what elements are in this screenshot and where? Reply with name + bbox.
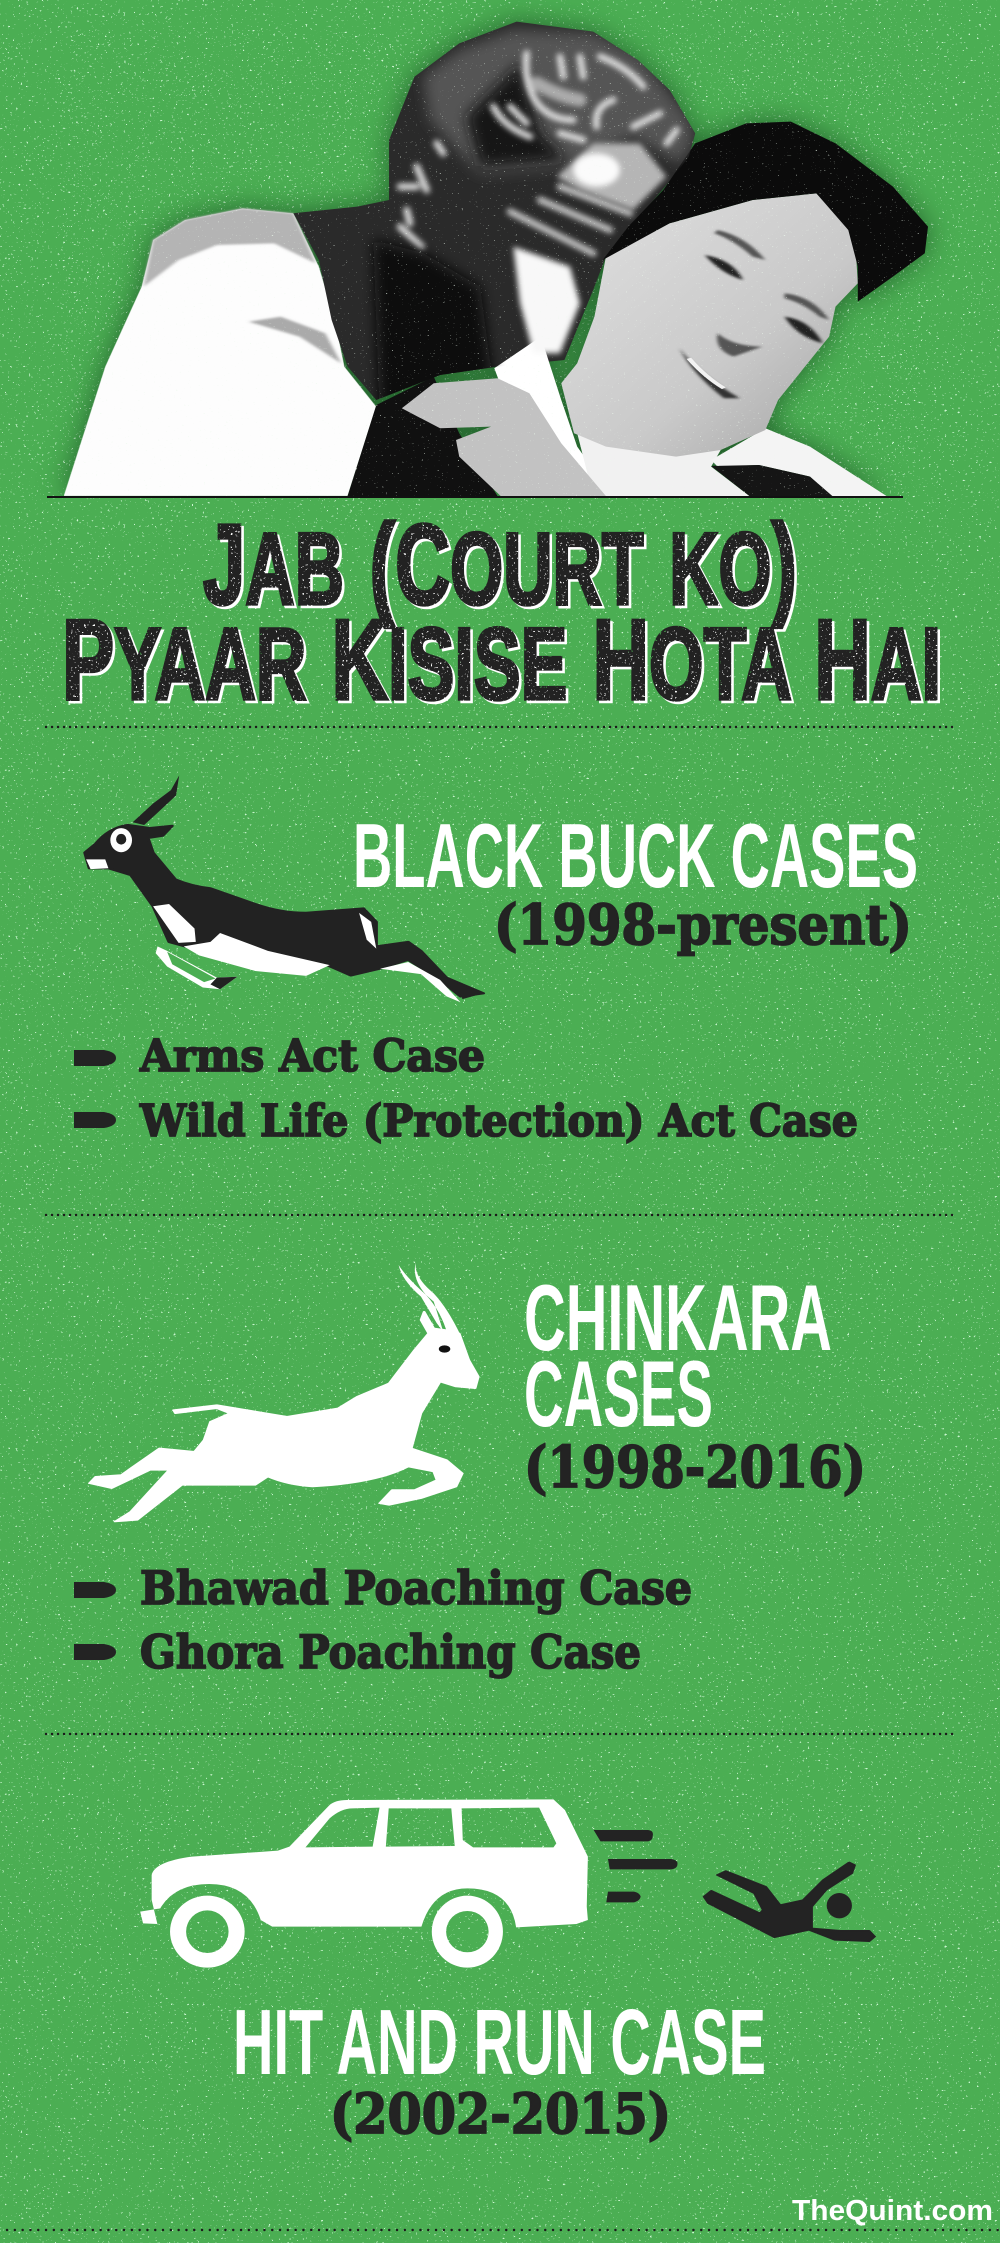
speed lines — [594, 1830, 677, 1902]
case: bhawad: Bhawad Poaching Case — [140, 1561, 692, 1615]
photo base line — [47, 496, 903, 498]
title line 2: PYAAR KISISE HOTA HAI — [62, 597, 941, 724]
horns — [399, 1262, 460, 1335]
silhouette — [89, 1312, 478, 1522]
forehead silver — [557, 143, 667, 210]
hair grey masses — [423, 30, 693, 173]
rear leg patch — [380, 962, 460, 1002]
title — [62, 502, 941, 724]
case: arms act: Arms Act Case — [139, 1031, 485, 1082]
date range: (1998-present) — [494, 892, 912, 957]
man's face — [561, 193, 858, 457]
rump patch — [359, 913, 376, 949]
man's shirt — [577, 433, 749, 496]
rear wheel — [170, 1896, 245, 1968]
heading line 2: CASES — [524, 1341, 713, 1446]
photo speckles — [60, 30, 920, 496]
lower dark torso — [348, 377, 497, 496]
cheek highlight — [513, 247, 580, 353]
horn — [133, 775, 179, 825]
statue head and dark torso — [293, 22, 695, 400]
smile — [679, 348, 740, 398]
nose — [717, 333, 762, 357]
front wheel — [432, 1896, 503, 1968]
section: black buck cases — [74, 775, 918, 1147]
man's hair — [603, 122, 928, 302]
bullet — [74, 1582, 116, 1598]
car body — [140, 1799, 588, 1927]
statue arm and shoulder in white — [64, 208, 376, 496]
case: ghora: Ghora Poaching Case — [140, 1625, 641, 1679]
man's right shoulder — [711, 428, 887, 496]
eye — [439, 1345, 450, 1353]
teeth — [689, 358, 724, 388]
shoulder shading — [144, 208, 316, 287]
body — [85, 825, 483, 996]
hind and fore legs white — [156, 946, 237, 989]
statue hair, blindfold and cheek tones — [373, 30, 693, 420]
belly patch — [184, 933, 330, 976]
logo: TheQuint.com: TheQuint.com — [792, 2195, 993, 2227]
bullet — [74, 1644, 116, 1660]
case: wild life act: Wild Life (Protection) Act Case — [139, 1096, 858, 1147]
arm fold shading — [249, 317, 341, 363]
man's collar — [485, 341, 588, 475]
photo: blindfolded justice statue embracing a smiling man — [64, 22, 928, 496]
section: chinkara cases — [74, 1262, 866, 1679]
date range: (1998-2016) — [524, 1434, 866, 1501]
eyebrow and eye left — [714, 230, 765, 260]
falling person — [704, 1862, 875, 1941]
bullet — [74, 1050, 116, 1066]
icon: car — [140, 1799, 875, 1968]
title line 1: JAB (COURT KO) — [203, 502, 797, 629]
white face — [110, 828, 132, 852]
hand on shoulder — [402, 378, 606, 496]
date range: (2002-2015) — [330, 2081, 671, 2146]
neck darkness — [373, 240, 493, 420]
chest patch — [153, 904, 196, 943]
hair curls — [400, 53, 677, 247]
icon: chinkara — [89, 1262, 478, 1522]
blindfold bands — [510, 187, 630, 253]
bullet — [74, 1112, 116, 1128]
icon: black buck — [85, 775, 483, 1002]
eyebrow and eye right — [784, 293, 829, 320]
man's features — [679, 230, 829, 398]
section: hit and run case — [140, 1799, 875, 2146]
